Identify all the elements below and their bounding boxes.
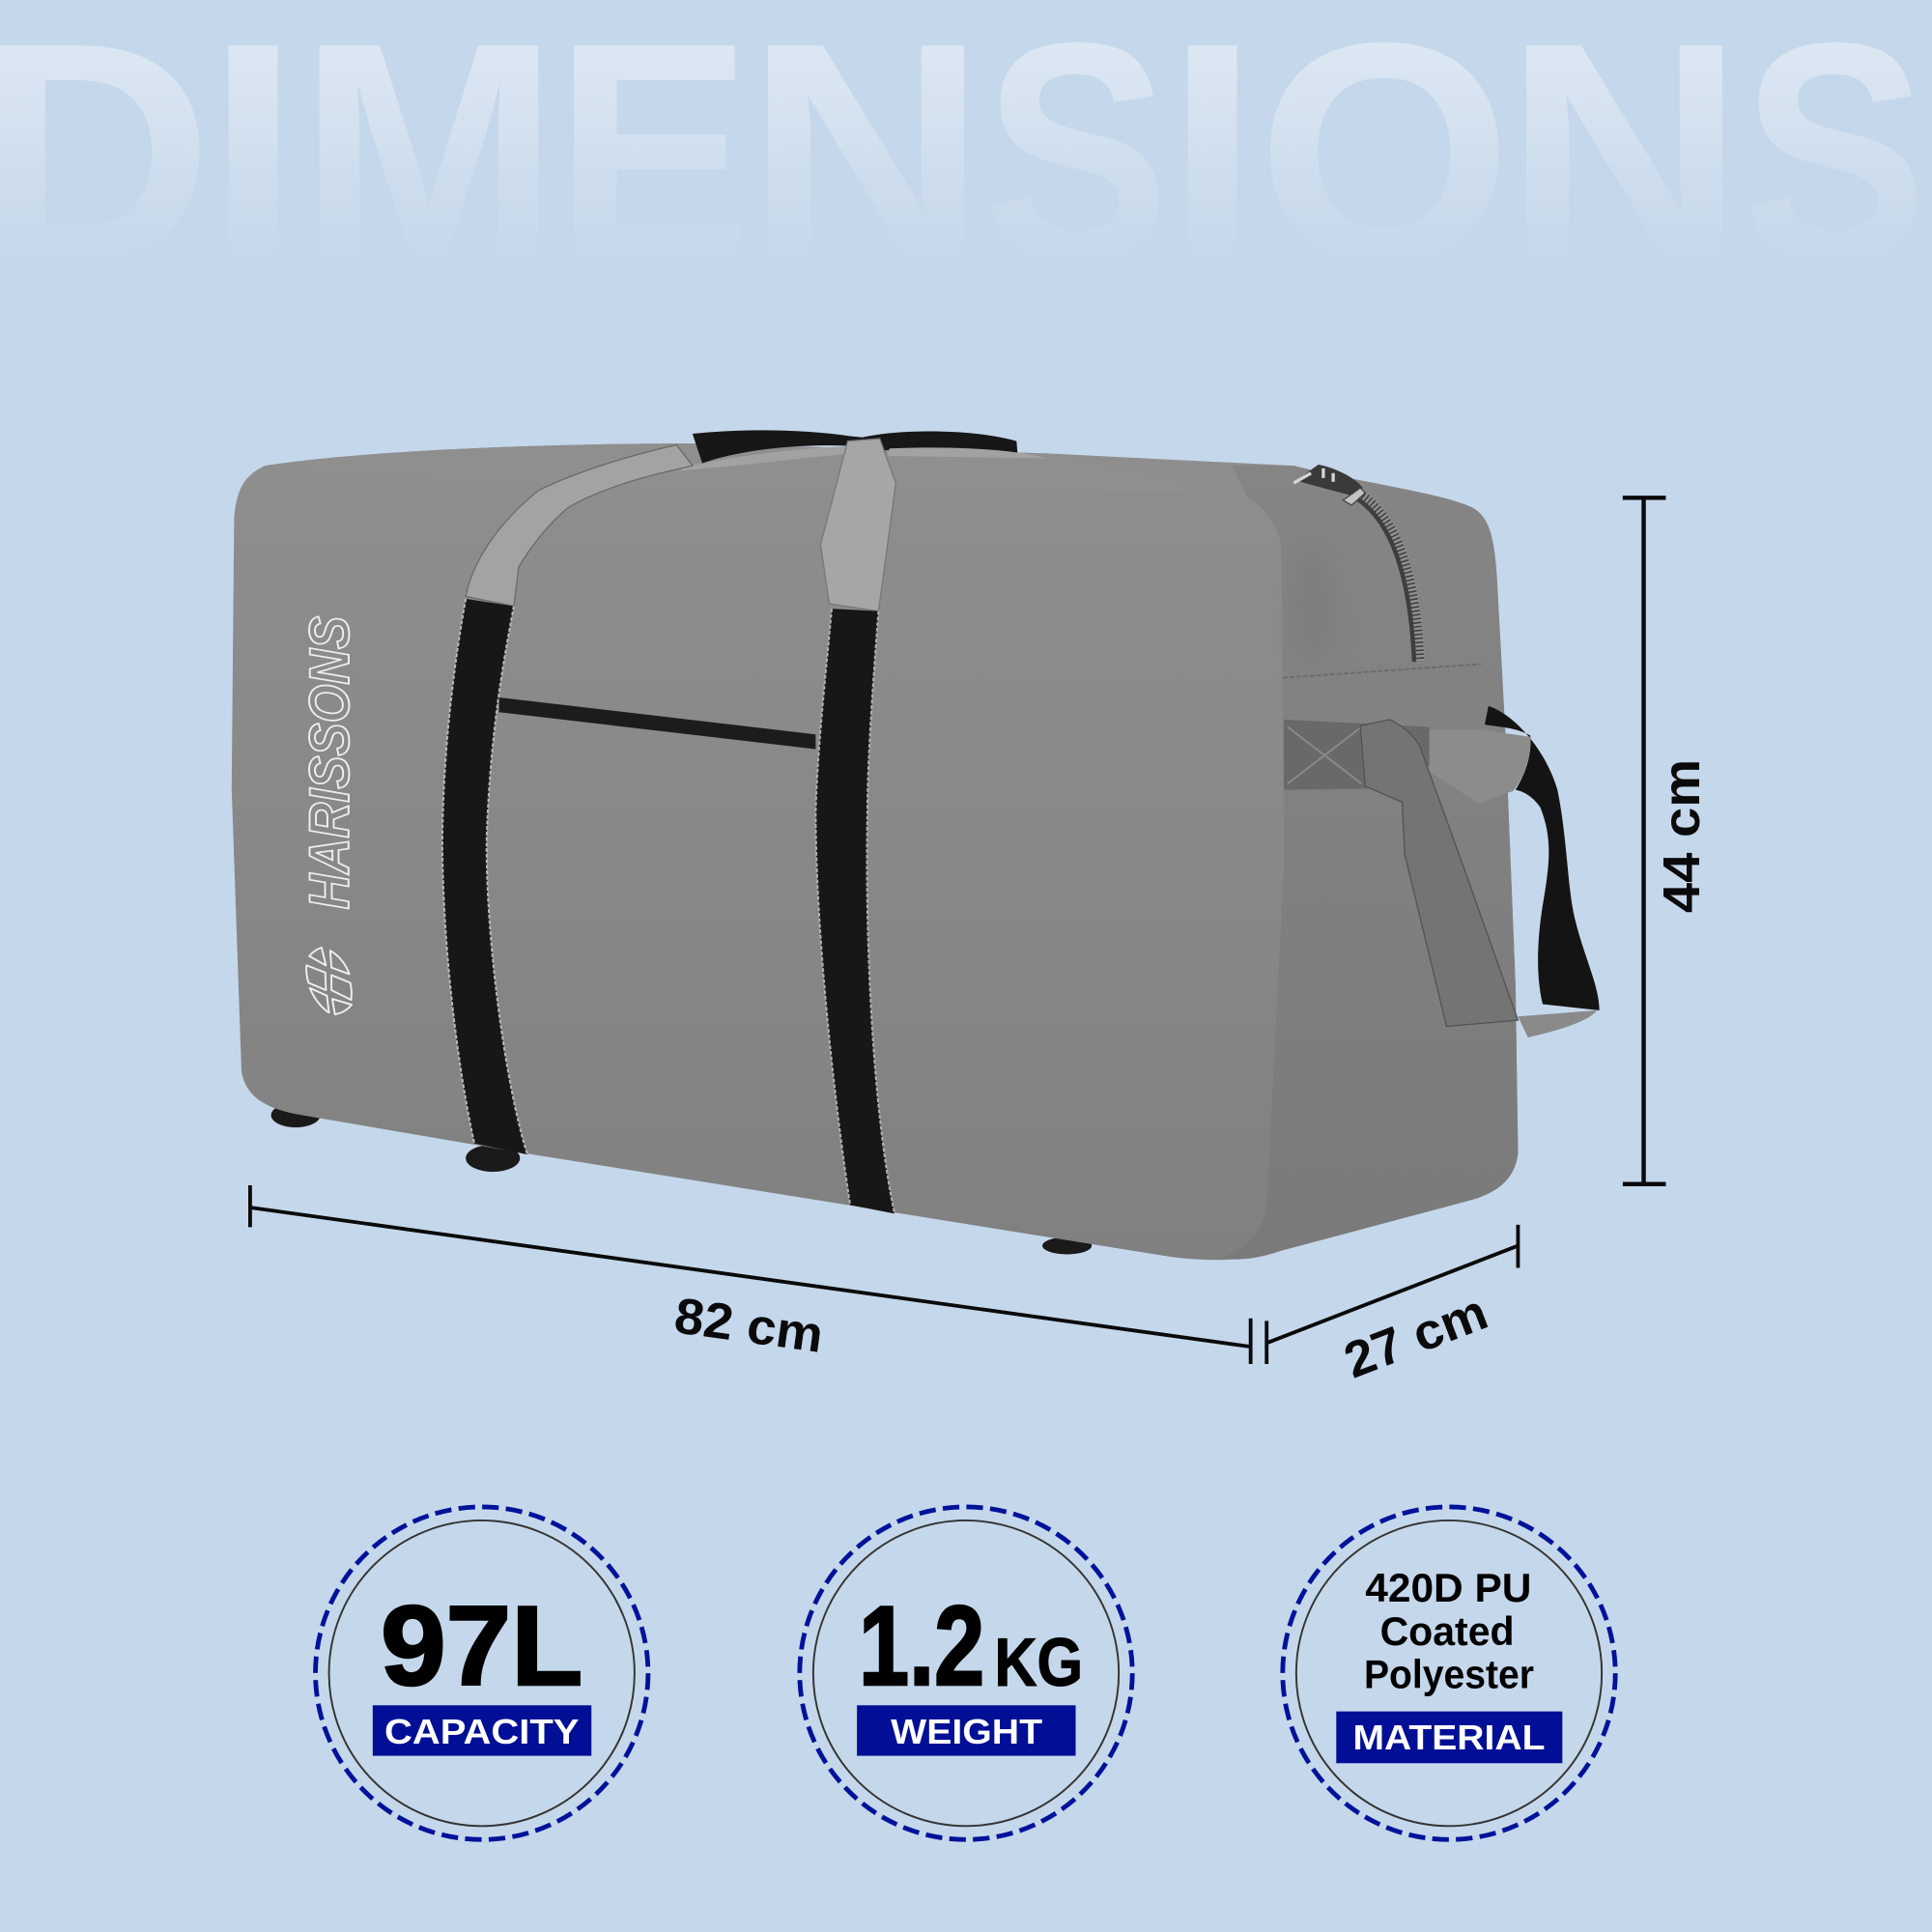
side strap patch [1284,720,1430,790]
zipper track [1355,492,1421,662]
capacity badge rings [316,1507,648,1839]
material value [1364,1565,1534,1696]
duffel bag product illustration [232,430,1600,1260]
capacity value: 97L [381,1582,582,1709]
gray handle strips [681,446,1047,470]
capacity tag [373,1705,591,1756]
zipper pullers [1293,465,1365,505]
badge: material [1283,1507,1615,1839]
label: 82 cm: 82 cm [671,1288,827,1364]
material value: 420D PU [1365,1565,1531,1610]
weight tag [857,1705,1076,1756]
wheels [271,1103,1092,1254]
weight badge rings [800,1507,1132,1839]
side handle padded grip [1427,729,1530,804]
weight tag: WEIGHT [891,1712,1042,1751]
left strap stitching [442,599,527,1154]
dimension: length 82 cm [250,1185,1251,1364]
side seam [1283,665,1481,678]
bag right side panel [1220,466,1518,1260]
badge: capacity [316,1507,648,1839]
brand wordmark: HARISSONS [298,616,361,909]
material tag [1336,1712,1562,1763]
right black strap [815,609,895,1213]
material badge rings [1283,1507,1615,1839]
badge: weight [800,1507,1132,1839]
label: 27 cm: 27 cm [1337,1284,1495,1389]
title: DIMENSIONS watermark [0,0,1927,327]
side handle lower grip [1518,1010,1597,1037]
capacity tag: CAPACITY [384,1712,579,1751]
weight value: 1.2 [859,1582,984,1709]
label: 44 cm: 44 cm [1654,759,1711,913]
side strap hanging [1360,720,1518,1026]
left black strap [442,599,527,1154]
right strap stitching [815,609,895,1213]
material value: Polyester [1364,1651,1534,1696]
right gray strap [820,439,895,611]
material value: Coated [1380,1608,1515,1654]
top black grab handle [693,430,1018,464]
brand emblem [306,948,352,1014]
bag body [232,443,1518,1260]
pocket zipper line [499,697,815,750]
dimension: height 44 cm [1623,497,1665,1184]
weight value: KG [994,1624,1083,1700]
dimension: depth 27 cm [1266,1225,1518,1364]
bag top panel shading [265,443,1247,497]
left gray strap [466,444,693,607]
side panel crease shading [1293,542,1333,666]
side handle black loop [1485,706,1600,1010]
material tag: MATERIAL [1353,1718,1545,1757]
